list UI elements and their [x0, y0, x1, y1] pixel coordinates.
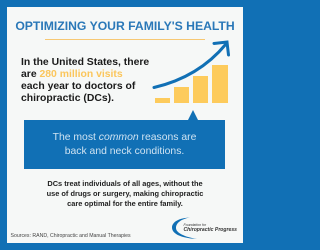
- title underline: [45, 39, 205, 40]
- text block: statistic: chiropractic (DCs).: [21, 92, 114, 104]
- text block: description: care optimal for the entire family.: [67, 199, 183, 208]
- logo text: Foundation for: [184, 223, 206, 227]
- logo text: Chiropractic Progress: [184, 226, 237, 232]
- text block: statistic: are 280 million visits: [21, 68, 123, 80]
- logo swoosh: [172, 218, 196, 239]
- callout: common reasons: [24, 120, 225, 169]
- title: OPTIMIZING YOUR FAMILY'S HEALTH: [15, 18, 235, 32]
- text block: statistic: each year to doctors of: [21, 80, 135, 92]
- logo: Foundation for Chiropractic Progress: [172, 218, 237, 239]
- sources: Sources: RAND, Chiropractic and Manual Therapies: [10, 233, 131, 239]
- bar 3: [193, 76, 208, 103]
- chart: rising bars with arrow: [152, 40, 230, 103]
- bar 1: [155, 98, 170, 103]
- bar 4: [212, 65, 228, 103]
- callout text: back and neck conditions.: [65, 146, 184, 157]
- bar 2: [174, 87, 189, 103]
- callout text: [52, 132, 196, 157]
- text block: description: [47, 178, 204, 208]
- text block: statistic: [21, 56, 149, 104]
- arrow: [154, 42, 228, 88]
- panel: inner background: [6, 6, 243, 243]
- logo text: [184, 223, 237, 232]
- text block: statistic: In the United States, there: [21, 56, 149, 68]
- text block: description: use of drugs or surgery, making chiropractic: [47, 189, 203, 198]
- text block: description: DCs treat individuals of all ages, without the: [47, 178, 203, 188]
- callout pointer: [188, 110, 198, 120]
- callout text: The most common reasons are: [53, 132, 196, 142]
